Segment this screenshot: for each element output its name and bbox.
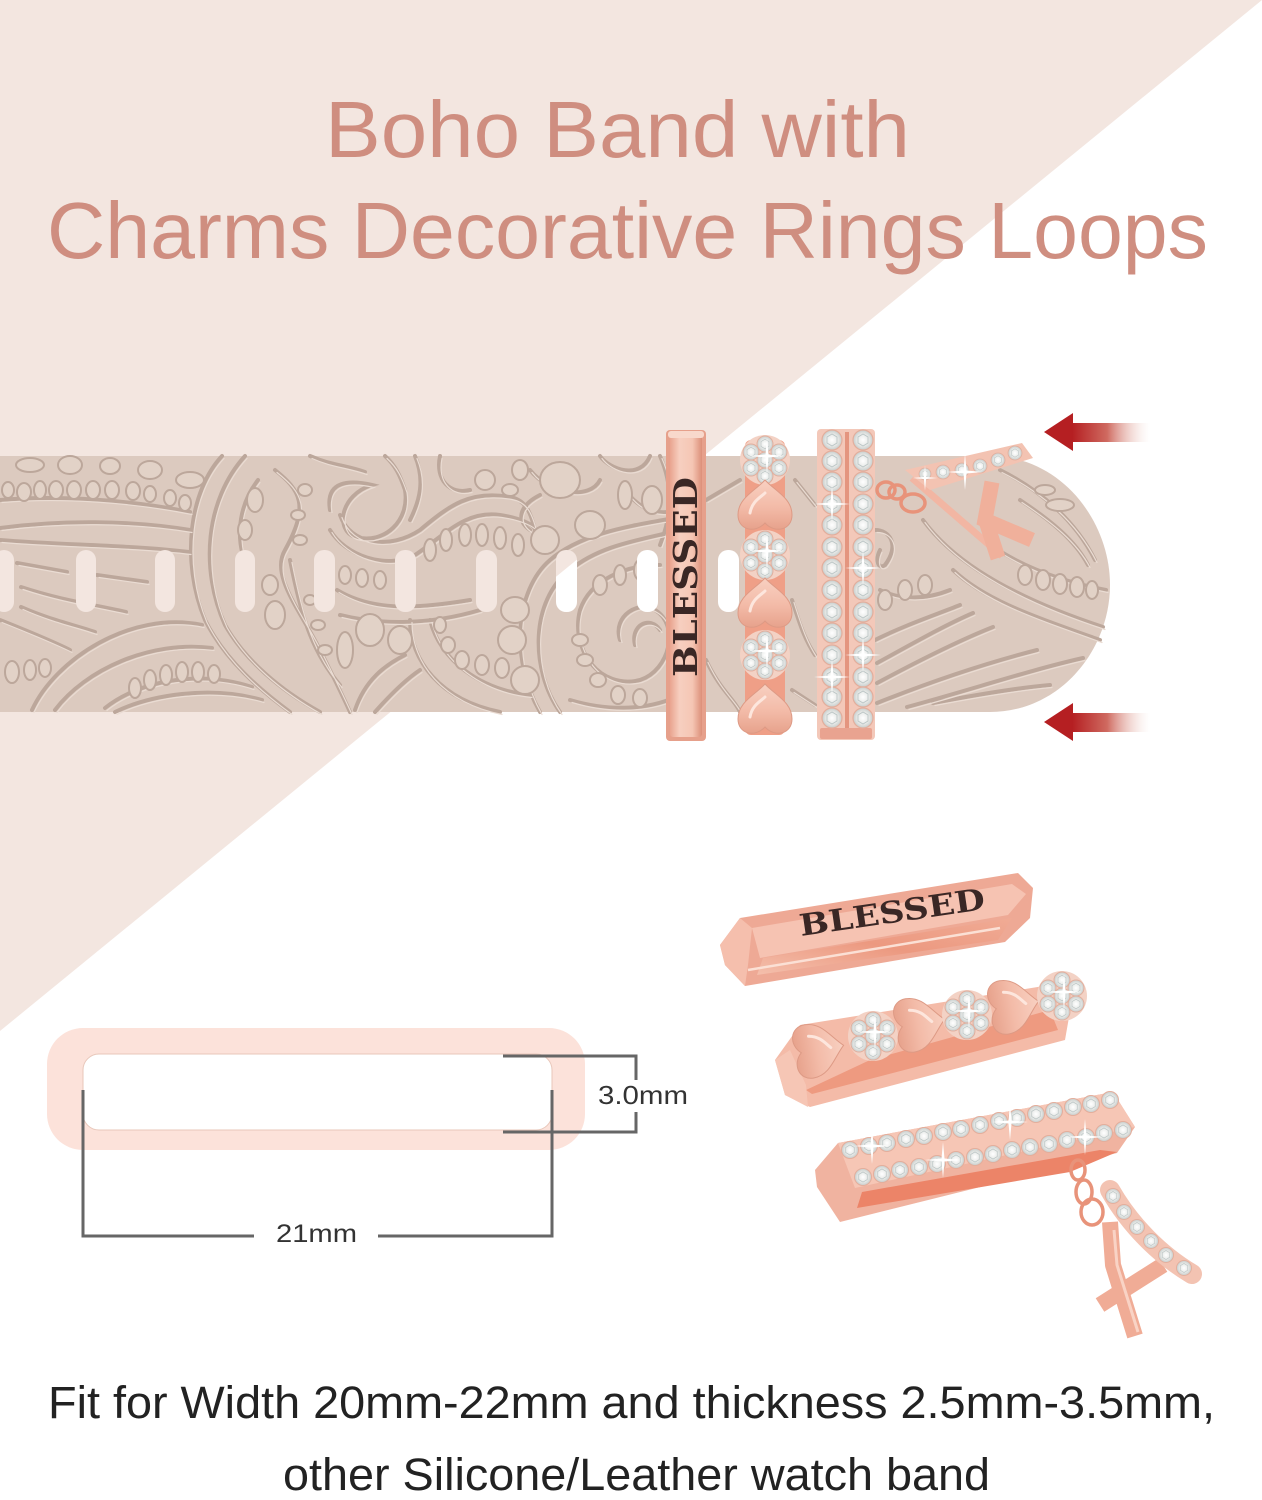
dimension: 21mm width: 21mm xyxy=(276,1220,357,1248)
product: double crystal row loop with letter A xyxy=(815,1092,1192,1336)
title xyxy=(47,85,1208,275)
arrow: bottom red arrow xyxy=(1044,703,1150,741)
diagonal pink background panel xyxy=(0,0,1262,1031)
product: BLESSED loop: BLESSED xyxy=(797,882,987,944)
charm on band: BLESSED loop: BLESSED xyxy=(666,477,705,677)
caption text xyxy=(48,1377,1215,1500)
dimension: 3.0mm thickness: 3.0mm xyxy=(598,1080,688,1110)
caption text: other Silicone/Leather watch band xyxy=(283,1449,990,1500)
dimension: 21mm width xyxy=(83,1090,552,1248)
caption text: Fit for Width 20mm-22mm and thickness 2.5mm-3.5mm, xyxy=(48,1377,1215,1428)
charm on band: double crystal row loop xyxy=(814,429,881,740)
title: Charms Decorative Rings Loops xyxy=(47,186,1208,275)
product: BLESSED loop xyxy=(720,873,1033,986)
product: hearts and crystal loop xyxy=(775,971,1087,1107)
charm on band: hearts and crystal loop xyxy=(738,435,792,735)
dimension: 3.0mm thickness xyxy=(503,1056,688,1132)
charm on band: BLESSED loop xyxy=(666,430,706,741)
arrow: top red arrow xyxy=(1044,413,1150,451)
dimension diagram: ring outline xyxy=(47,1028,585,1150)
title: Boho Band with xyxy=(325,85,910,174)
charm on band: letter A dangle xyxy=(877,443,1033,558)
embossed boho watch band xyxy=(0,456,1110,714)
